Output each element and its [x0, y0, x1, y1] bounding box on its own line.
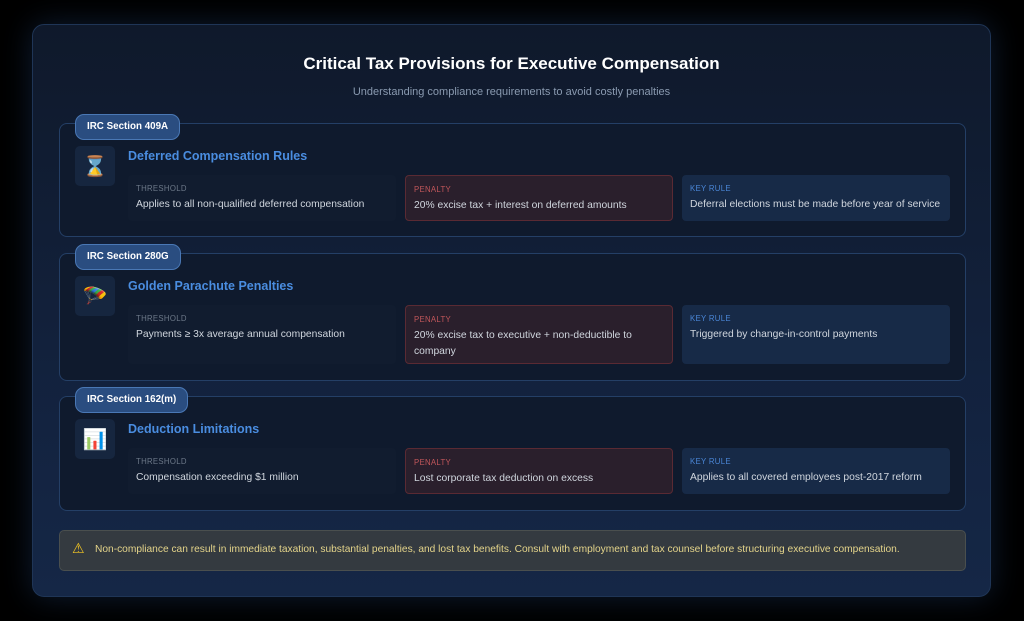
badge [75, 244, 181, 270]
threshold: THRESHOLD [136, 184, 187, 193]
badge: IRC Section 162(m) [87, 394, 176, 405]
callout: warning [59, 530, 966, 571]
icon: parachute [75, 276, 115, 316]
penalty: Lost corporate tax deduction on excess [414, 473, 593, 484]
threshold [128, 175, 396, 221]
icon: chart: 📊 [83, 428, 107, 450]
threshold [128, 305, 396, 364]
key rule: Deferral elections must be made before year of service [690, 199, 940, 210]
penalty [405, 175, 673, 221]
key rule: KEY RULE [690, 184, 731, 193]
badge: IRC Section 409A [87, 121, 168, 132]
panel: section 280G [59, 253, 966, 381]
icon: chart [75, 419, 115, 459]
key rule: KEY RULE [690, 314, 731, 323]
penalty: PENALTY [414, 458, 451, 467]
threshold: Payments ≥ 3x average annual compensation [136, 329, 345, 340]
threshold: Applies to all non-qualified deferred compensation [136, 199, 364, 210]
key rule [682, 305, 950, 364]
badge: IRC Section 280G [87, 251, 169, 262]
callout: warning: ⚠ [72, 540, 85, 556]
icon: hourglass: ⌛ [83, 156, 107, 178]
heading: Deduction Limitations [128, 422, 259, 436]
badge [75, 114, 180, 140]
callout: warning: Non-compliance can result in immediate taxation, substantial penalties, and lost tax benefits. Consult with employment and tax counsel before structuring executive compensation. [95, 544, 900, 555]
key rule [682, 448, 950, 494]
threshold [128, 448, 396, 494]
penalty: 20% excise tax + interest on deferred amounts [414, 200, 627, 211]
heading: Golden Parachute Penalties [128, 279, 293, 293]
icon: parachute: 🪂 [83, 286, 107, 308]
penalty: PENALTY [414, 185, 451, 194]
icon: hourglass [75, 146, 115, 186]
subtitle: Understanding compliance requirements to avoid costly penalties [353, 86, 670, 98]
penalty [405, 448, 673, 494]
threshold: Compensation exceeding $1 million [136, 472, 299, 483]
key rule: KEY RULE [690, 457, 731, 466]
panel: section 162(m) [59, 396, 966, 511]
threshold: THRESHOLD [136, 457, 187, 466]
title: Critical Tax Provisions for Executive Compensation [303, 54, 720, 73]
badge [75, 387, 188, 413]
key rule: Triggered by change-in-control payments [690, 329, 877, 340]
panel: section 409A [59, 123, 966, 237]
threshold: THRESHOLD [136, 314, 187, 323]
key rule: Applies to all covered employees post-2017 reform [690, 472, 922, 483]
penalty: 20% excise tax to executive + non-deductible to company [414, 330, 632, 357]
heading: Deferred Compensation Rules [128, 149, 307, 163]
penalty: PENALTY [414, 315, 451, 324]
penalty [405, 305, 673, 364]
key rule [682, 175, 950, 221]
